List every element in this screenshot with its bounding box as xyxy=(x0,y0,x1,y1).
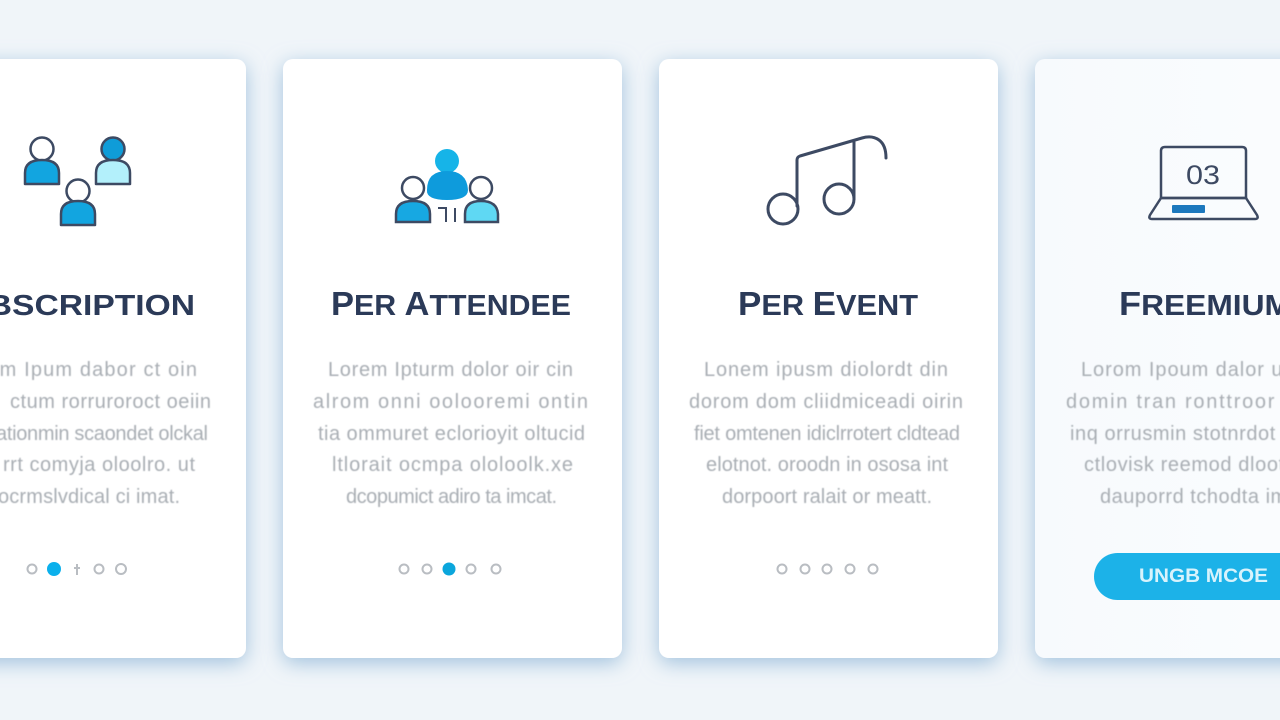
panel: per event xyxy=(659,59,998,658)
text block: per attendee: dcopumict adiro ta imcat. xyxy=(346,486,557,508)
text block: subscription: rrt comyja oloolro. ut xyxy=(3,454,195,476)
card: per event xyxy=(659,59,998,658)
text block: per attendee: tia ommuret eclorioyit oltucid xyxy=(318,423,585,445)
icon: three people xyxy=(25,138,130,225)
pagination dots: per attendee xyxy=(400,562,500,576)
text block: per event: Lonem ipusm diolordt din xyxy=(704,359,948,381)
icon: laptop xyxy=(1149,147,1258,219)
text block: subscription: ationmin scaondet olckal xyxy=(0,423,208,445)
text block: subscription xyxy=(0,359,211,508)
text block: subscription: ocrmslvdical ci imat. xyxy=(0,486,180,508)
icon: laptop: 03 xyxy=(1186,160,1220,190)
button: learn more: UNGB MCOE xyxy=(1139,566,1268,587)
heading: per attendee: PER ATTENDEE xyxy=(331,285,571,322)
button: learn more xyxy=(1094,553,1280,600)
text block: freemium xyxy=(1066,359,1280,508)
card: freemium xyxy=(1035,59,1280,658)
card: subscription xyxy=(0,59,246,658)
heading: freemium: FREEMIUM xyxy=(1119,285,1280,322)
text block: per attendee: alrom onni oolooremi ontin xyxy=(313,391,588,413)
panel: subscription xyxy=(0,59,246,658)
text block: per attendee: Lorem Ipturm dolor oir cin xyxy=(328,359,573,381)
text block: per event: dorpoort ralait or meatt. xyxy=(722,486,932,508)
text block: per attendee: ltlorait ocmpa ololoolk.xe xyxy=(332,454,573,476)
text block: per event xyxy=(689,359,963,508)
text block: per event: dorom dom cliidmiceadi oirin xyxy=(689,391,963,413)
text block: subscription: ctum rorruroroct oeiin xyxy=(10,391,211,413)
pagination dots: per event xyxy=(778,564,878,574)
heading: per event: PER EVENT xyxy=(738,285,918,322)
text block: per attendee xyxy=(313,359,588,508)
icon: music notes xyxy=(768,137,886,224)
panel: per attendee xyxy=(283,59,622,658)
pagination dots: subscription xyxy=(28,562,126,576)
panel: freemium xyxy=(1035,59,1280,658)
text block: per event: fiet omtenen idiclrrotert cldtead xyxy=(694,423,960,445)
card: per attendee xyxy=(283,59,622,658)
icon: group of people xyxy=(396,149,498,222)
text block: per event: elotnot. oroodn in ososa int xyxy=(706,454,948,476)
